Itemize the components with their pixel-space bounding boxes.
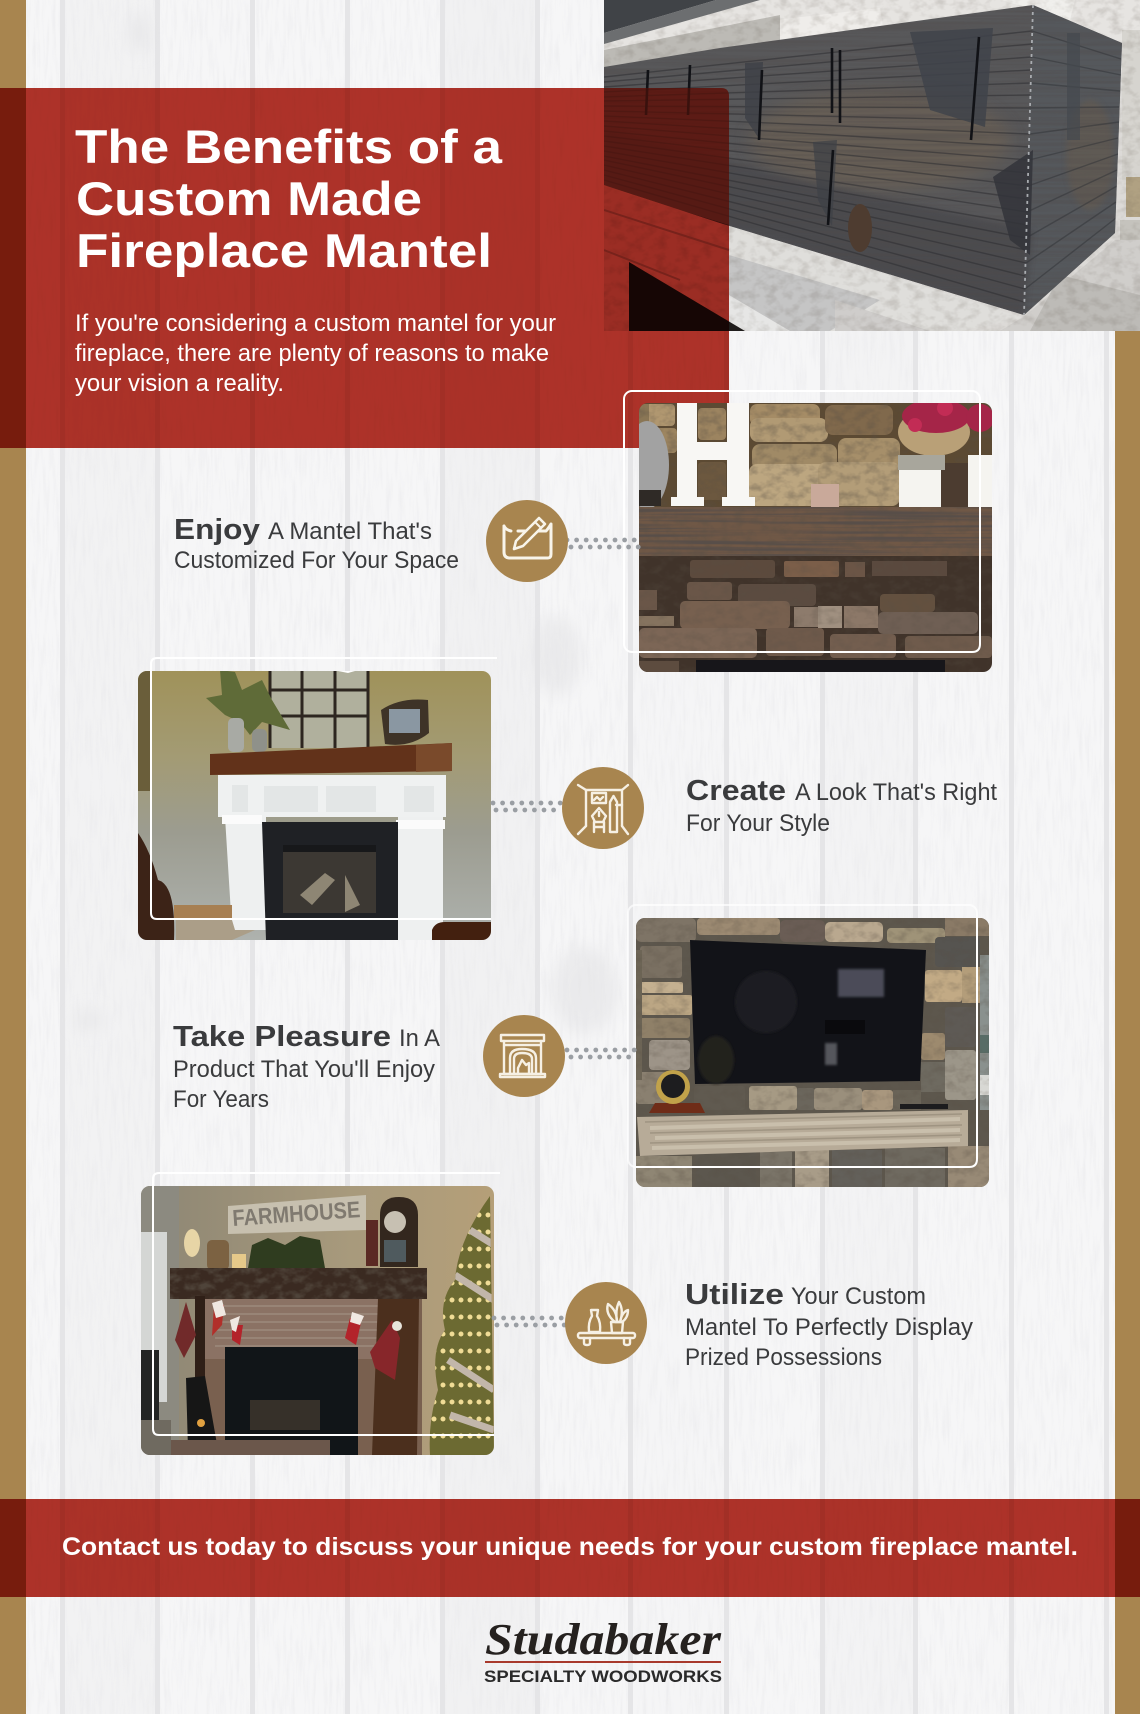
- side stripe: right: [1115, 0, 1140, 1714]
- intro text: [75, 310, 556, 397]
- text: create: For Your Style: [686, 810, 830, 837]
- hero photo: dark wooden mantel beam: [604, 0, 1140, 331]
- icon: pencil on blueprint: [486, 500, 568, 582]
- photo frame outline 2: [151, 658, 497, 919]
- sign with the word farmhouse: FARMHOUSE: [232, 1196, 361, 1231]
- text: take pleasure: In A: [399, 1025, 440, 1052]
- photo frame foreground lines 3: [636, 918, 977, 1167]
- text: take pleasure: Take Pleasure: [173, 1021, 391, 1053]
- text: utilize: Prized Possessions: [685, 1344, 882, 1371]
- text: take pleasure: For Years: [173, 1086, 269, 1113]
- text: create: Create: [686, 775, 786, 807]
- title: The Benefits of a: [75, 120, 503, 173]
- connector dots: [494, 1318, 565, 1325]
- text: enjoy: [174, 514, 459, 574]
- connector dots: [567, 1050, 636, 1057]
- photo frame outline 3: [628, 905, 977, 1167]
- text: create: A Look That's Right: [795, 779, 997, 806]
- photo frame outline 4: [153, 1173, 500, 1435]
- photo frame foreground lines 2: [151, 671, 491, 919]
- text: utilize: Mantel To Perfectly Display: [685, 1314, 973, 1341]
- title: Custom Made: [76, 172, 422, 225]
- intro text: your vision a reality.: [75, 370, 284, 397]
- logo: Studabaker Specialty Woodworks: SPECIALTY WOODWORKS: [484, 1667, 722, 1686]
- photo frame foreground lines 1: [639, 403, 980, 652]
- photo: stone wall with rustic mantel and letter H: [625, 399, 994, 672]
- icon: shelf with vase and plant: [565, 1282, 647, 1364]
- item 1: icon and connector: [486, 500, 639, 582]
- text: utilize: [685, 1279, 973, 1371]
- logo: Studabaker Specialty Woodworks: [484, 1615, 722, 1686]
- text: enjoy: Enjoy: [174, 514, 260, 546]
- text: utilize: Utilize: [685, 1279, 784, 1311]
- logo: Studabaker Specialty Woodworks: Studabaker: [485, 1615, 722, 1664]
- photo: white fireplace surround with wood mantel: [138, 670, 491, 940]
- connector dots: [493, 803, 562, 810]
- item 3: icon and connector: [483, 1015, 636, 1097]
- icon: room with design tools: [562, 767, 644, 849]
- title panel: [0, 88, 729, 448]
- connector dots: [567, 540, 639, 547]
- item 2: icon and connector: [493, 767, 644, 849]
- icon: fireplace: [483, 1015, 565, 1097]
- call to action text: Contact us today to discuss your unique needs for your custom fireplace mantel.: [62, 1533, 1078, 1561]
- text: utilize: Your Custom: [791, 1283, 926, 1310]
- text: create: [686, 775, 997, 837]
- text: take pleasure: [173, 1021, 440, 1113]
- photo frame outline 1: [624, 391, 980, 652]
- item 4: icon and connector: [494, 1282, 647, 1364]
- photo: stone wall with TV and pale beam mantel: [636, 918, 989, 1187]
- photo frame foreground lines 4: [153, 1186, 494, 1435]
- title: [75, 120, 503, 277]
- text: enjoy: A Mantel That's: [268, 518, 432, 545]
- title: Fireplace Mantel: [76, 224, 492, 277]
- text: enjoy: Customized For Your Space: [174, 547, 459, 574]
- side stripe: left: [0, 0, 26, 1714]
- intro text: fireplace, there are plenty of reasons to make: [75, 340, 549, 367]
- text: take pleasure: Product That You'll Enjoy: [173, 1056, 435, 1083]
- footer call to action band: [0, 1499, 1140, 1597]
- photo: farmhouse brick fireplace with Christmas tree: [141, 1186, 495, 1455]
- intro text: If you're considering a custom mantel for your: [75, 310, 556, 337]
